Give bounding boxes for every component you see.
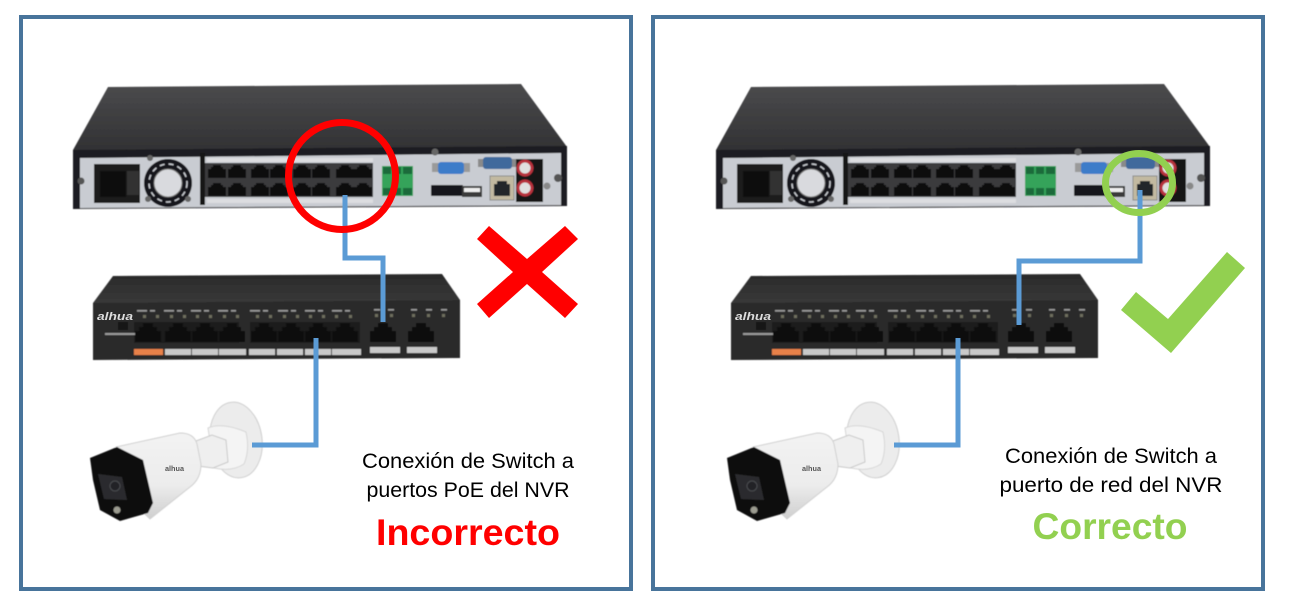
icon: red cross — [477, 226, 578, 318]
PoE switch device — [93, 274, 460, 360]
panel: correct connection — [653, 17, 1263, 589]
NVR device — [73, 84, 567, 209]
cable: camera to switch — [252, 338, 316, 445]
PoE switch device: alhua — [97, 311, 133, 323]
security camera: alhua — [165, 466, 184, 473]
PoE switch device: alhua — [735, 311, 771, 323]
panel frame: correct — [653, 17, 1263, 589]
red circle on PoE ports — [288, 122, 396, 230]
caption: correct — [1000, 445, 1222, 497]
panel: incorrect connection — [21, 17, 631, 589]
caption: incorrect: puertos PoE del NVR — [366, 479, 570, 502]
cable: switch to NVR network port — [1019, 190, 1140, 325]
caption: incorrect: Conexión de Switch a — [362, 450, 574, 473]
verdict: Correcto: Correcto — [1032, 506, 1188, 547]
verdict: Incorrecto: Incorrecto — [376, 512, 560, 553]
cable: switch to NVR PoE ports — [345, 195, 383, 322]
NVR device — [716, 84, 1210, 209]
security camera — [727, 399, 904, 521]
PoE switch device — [731, 274, 1098, 360]
security camera: alhua — [802, 466, 821, 473]
caption: correct: puerto de red del NVR — [1000, 474, 1222, 497]
cable: camera to switch — [894, 338, 958, 445]
caption: correct: Conexión de Switch a — [1005, 445, 1217, 468]
green ellipse on network port — [1106, 154, 1172, 212]
icon: green check mark — [1121, 252, 1245, 353]
panel frame: incorrect — [21, 17, 631, 589]
caption: incorrect — [362, 450, 574, 502]
security camera — [90, 399, 267, 521]
